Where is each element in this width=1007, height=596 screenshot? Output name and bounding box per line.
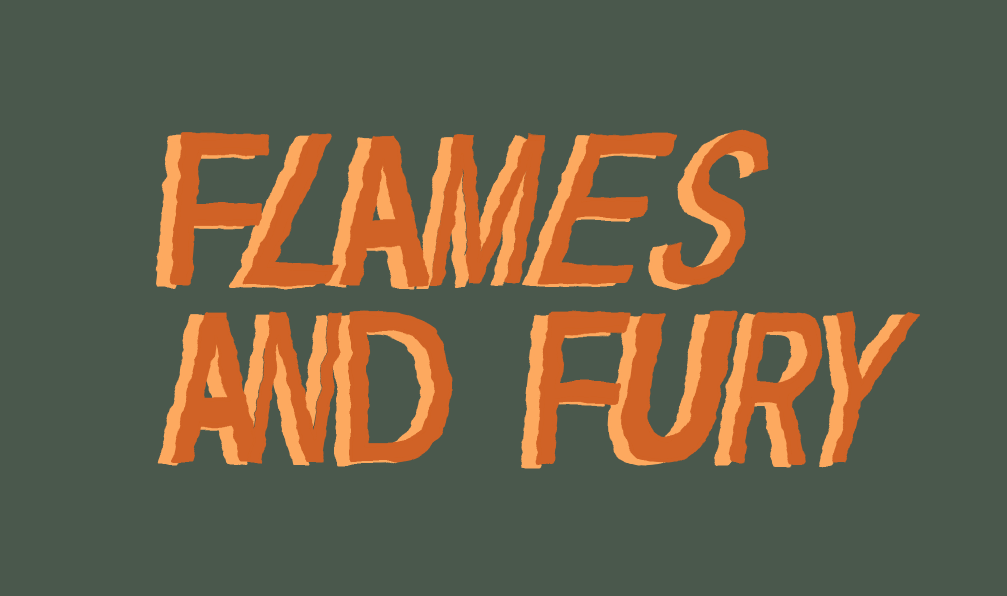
title line: FLAMES: A: [338, 92, 430, 328]
title line: AND FURY: A: [170, 270, 262, 506]
title line: FLAMES: L: [198, 94, 403, 331]
title line: AND FURY: R: [712, 269, 842, 506]
title line: FLAMES: E: [494, 94, 688, 330]
title line: AND FURY: N: [234, 270, 359, 506]
title line: FLAMES: [140, 90, 803, 331]
title line: FLAMES: M: [398, 94, 549, 330]
title line: FLAMES: S: [618, 93, 789, 330]
title line: AND FURY: F: [520, 268, 637, 505]
title line: AND FURY: U: [599, 268, 751, 505]
title line: AND FURY: N: [220, 273, 345, 509]
title line: AND FURY: [156, 268, 933, 509]
title line: AND FURY: A: [156, 273, 248, 509]
title line: AND FURY: D: [338, 269, 457, 506]
title line: FLAMES: F: [154, 90, 278, 327]
title line: AND FURY: U: [585, 271, 737, 508]
title line: FLAMES: F: [140, 93, 264, 330]
title line: FLAMES: L: [212, 91, 417, 328]
title line: AND FURY: R: [698, 272, 828, 509]
title line: FLAMES: S: [632, 90, 803, 327]
title line: AND FURY: Y: [785, 270, 933, 506]
title line: AND FURY: Y: [771, 273, 919, 509]
title line: FLAMES: A: [324, 95, 416, 331]
title line: AND FURY: F: [506, 271, 623, 508]
title line: FLAMES: E: [508, 91, 702, 327]
title line: AND FURY: D: [324, 272, 443, 509]
title line: FLAMES: M: [412, 91, 563, 327]
